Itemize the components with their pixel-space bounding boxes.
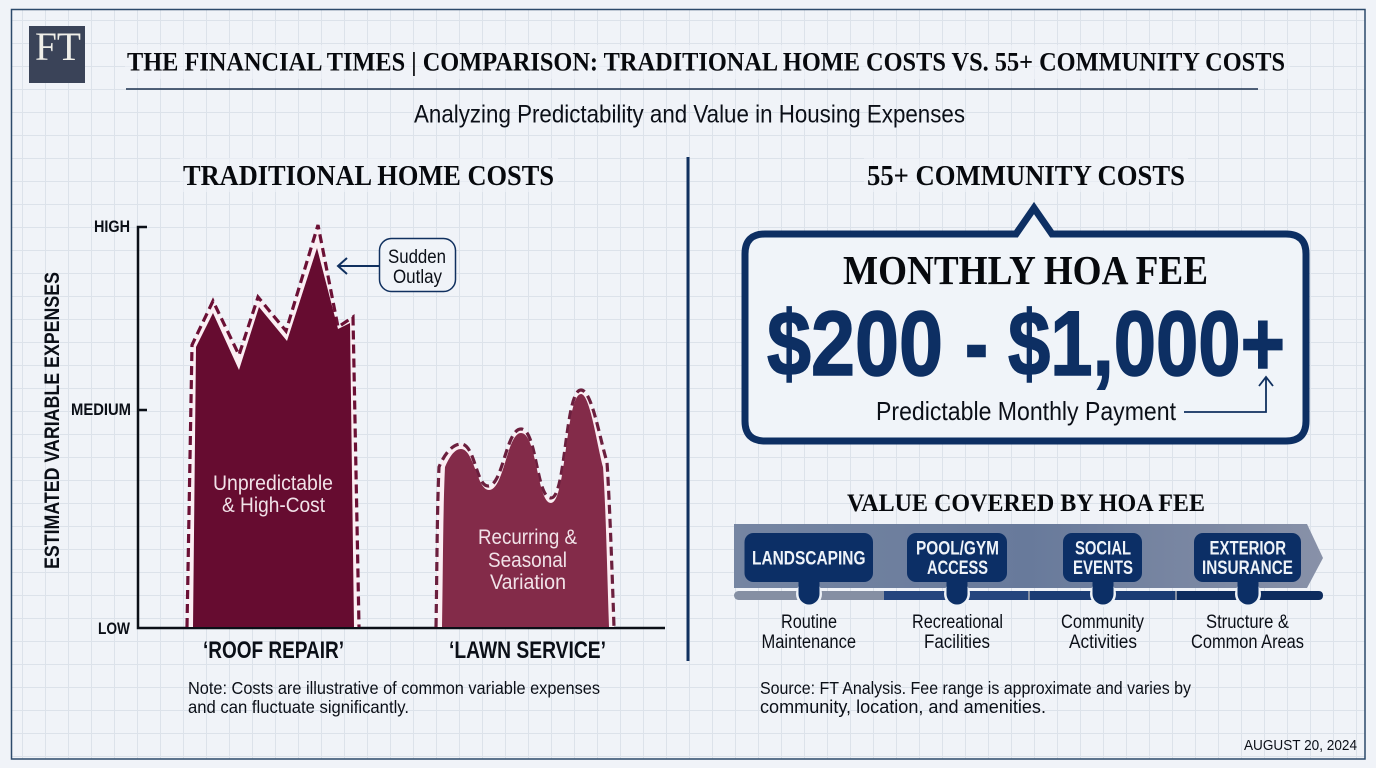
item: pool and gym access: POOL/GYM bbox=[916, 538, 999, 560]
category label: roof repair: ‘ROOF REPAIR’ bbox=[203, 637, 344, 664]
FT logo: FT bbox=[35, 24, 81, 69]
item: pool and gym access: ACCESS bbox=[927, 558, 988, 579]
category label: lawn service: ‘LAWN SERVICE’ bbox=[449, 637, 606, 664]
chart: axes and tick labels: LOW bbox=[98, 619, 131, 638]
item: exterior insurance: EXTERIOR bbox=[1210, 538, 1286, 560]
item: landscaping: Routine bbox=[781, 612, 837, 633]
source note: community, location, and amenities. bbox=[760, 696, 1046, 717]
chart: axes and tick labels: MEDIUM bbox=[71, 400, 131, 419]
item: landscaping: Maintenance bbox=[762, 632, 856, 653]
callout: monthly HOA fee bbox=[745, 208, 1306, 441]
item: landscaping bbox=[744, 533, 873, 653]
item: exterior insurance: INSURANCE bbox=[1202, 558, 1293, 579]
callout: monthly HOA fee: Predictable Monthly Payment bbox=[876, 396, 1177, 426]
heading: traditional home costs: TRADITIONAL HOME COSTS bbox=[183, 161, 554, 192]
area: roof repair bbox=[187, 225, 359, 627]
heading: value covered: VALUE COVERED BY HOA FEE bbox=[847, 490, 1205, 517]
timeline ribbon bbox=[734, 524, 1323, 600]
area: lawn service: Recurring & bbox=[478, 526, 577, 549]
subtitle: Analyzing Predictability and Value in Housing Expenses bbox=[414, 100, 965, 128]
item: social events: Activities bbox=[1069, 632, 1137, 653]
title: THE FINANCIAL TIMES | COMPARISON: TRADITIONAL HOME COSTS VS. 55+ COMMUNITY COSTS bbox=[127, 46, 1285, 76]
note: Note: Costs are illustrative of common variable expenses bbox=[188, 678, 600, 698]
item: pool and gym access: Recreational bbox=[912, 612, 1003, 633]
note bbox=[188, 678, 600, 717]
y axis title: ESTIMATED VARIABLE EXPENSES bbox=[41, 272, 64, 569]
chart: axes and tick labels bbox=[71, 217, 665, 638]
chart: axes and tick labels: HIGH bbox=[94, 217, 130, 236]
item: landscaping: LANDSCAPING bbox=[752, 548, 866, 570]
item: pool and gym access bbox=[907, 533, 1007, 653]
item: pool and gym access: Facilities bbox=[924, 632, 990, 653]
source note: Source: FT Analysis. Fee range is approximate and varies by bbox=[760, 678, 1191, 698]
item: social events: SOCIAL bbox=[1075, 538, 1131, 560]
item: exterior insurance bbox=[1191, 533, 1304, 653]
callout: monthly HOA fee: - bbox=[965, 293, 988, 395]
area: lawn service: Seasonal bbox=[488, 549, 567, 572]
panel: traditional home costs bbox=[41, 161, 665, 717]
area: roof repair: & High-Cost bbox=[222, 494, 325, 517]
callout: sudden outlay: Sudden bbox=[388, 247, 446, 268]
area: lawn service: Variation bbox=[490, 571, 566, 594]
source note bbox=[760, 678, 1191, 717]
note: and can fluctuate significantly. bbox=[188, 697, 409, 717]
callout: sudden outlay bbox=[338, 238, 456, 292]
callout: monthly HOA fee: MONTHLY HOA FEE bbox=[843, 247, 1208, 293]
item: social events: Community bbox=[1061, 612, 1144, 633]
area: roof repair: Unpredictable bbox=[213, 472, 333, 495]
callout: sudden outlay: Outlay bbox=[393, 267, 442, 288]
date: AUGUST 20, 2024 bbox=[1244, 737, 1357, 754]
item: social events bbox=[1061, 533, 1144, 653]
heading: 55+ community costs: 55+ COMMUNITY COSTS bbox=[867, 161, 1185, 192]
item: exterior insurance: Common Areas bbox=[1191, 632, 1304, 653]
item: exterior insurance: Structure & bbox=[1206, 612, 1289, 633]
callout: monthly HOA fee: $200 bbox=[767, 293, 943, 395]
callout: monthly HOA fee: $1,000+ bbox=[1008, 293, 1285, 395]
area: lawn service bbox=[436, 390, 614, 627]
item: social events: EVENTS bbox=[1073, 558, 1133, 579]
panel: 55+ community costs bbox=[734, 161, 1323, 717]
FT logo bbox=[29, 24, 85, 83]
